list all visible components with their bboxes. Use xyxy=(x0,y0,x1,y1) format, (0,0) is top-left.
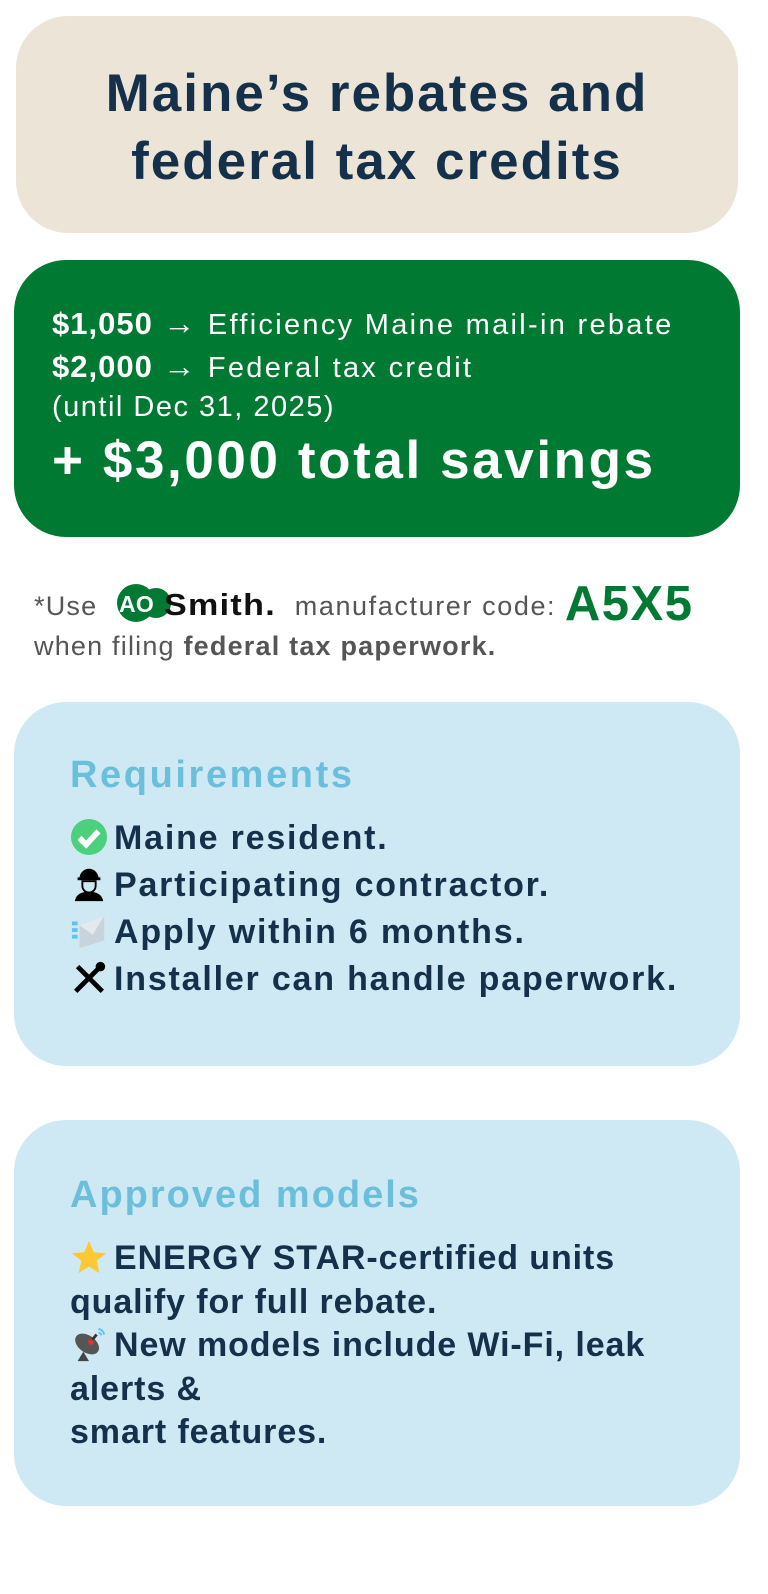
panel: savings xyxy=(14,260,740,537)
manufacturer code note: *Use manufacturer code: A5X5 xyxy=(34,577,693,631)
panel: approved models xyxy=(14,1120,740,1506)
icon: AO Smith logo: AO xyxy=(119,591,155,617)
item: wifi: New models include Wi-Fi, leak xyxy=(114,1326,645,1364)
item: energy star xyxy=(70,1239,615,1320)
total savings: + $3,000 total savings xyxy=(52,431,656,490)
savings line 2: $2,000 → Federal tax credit xyxy=(52,348,473,384)
savings line 1: $1,050 → Efficiency Maine mail-in rebate xyxy=(52,305,674,341)
approved models text xyxy=(70,1239,645,1451)
item: resident: Maine resident. xyxy=(114,819,389,857)
item: apply: Apply within 6 months. xyxy=(114,913,526,951)
requirement list xyxy=(71,819,678,998)
panel: requirements xyxy=(14,702,740,1066)
heading: approved models: Approved models xyxy=(70,1174,421,1216)
title: Maine’s rebates and xyxy=(106,64,648,123)
panel: title xyxy=(16,16,738,233)
heading: requirements: Requirements xyxy=(70,754,355,796)
icon: AO Smith logo: Smith. xyxy=(164,587,276,622)
icon: AO Smith logo xyxy=(117,584,276,622)
item: contractor: Participating contractor. xyxy=(114,866,550,904)
item: paperwork: Installer can handle paperwork. xyxy=(114,960,678,998)
savings line 3: (until Dec 31, 2025) xyxy=(52,391,335,423)
title: federal tax credits xyxy=(131,132,623,191)
item: wifi: alerts & xyxy=(70,1370,202,1408)
item: energy star: qualify for full rebate. xyxy=(70,1282,437,1320)
item: energy star: ENERGY STAR-certified units xyxy=(114,1239,615,1277)
item: wifi xyxy=(70,1326,645,1451)
manufacturer code note xyxy=(34,577,693,661)
item: wifi: smart features. xyxy=(70,1413,327,1451)
title xyxy=(106,64,648,191)
manufacturer code note: when filing federal tax paperwork. xyxy=(34,631,496,661)
